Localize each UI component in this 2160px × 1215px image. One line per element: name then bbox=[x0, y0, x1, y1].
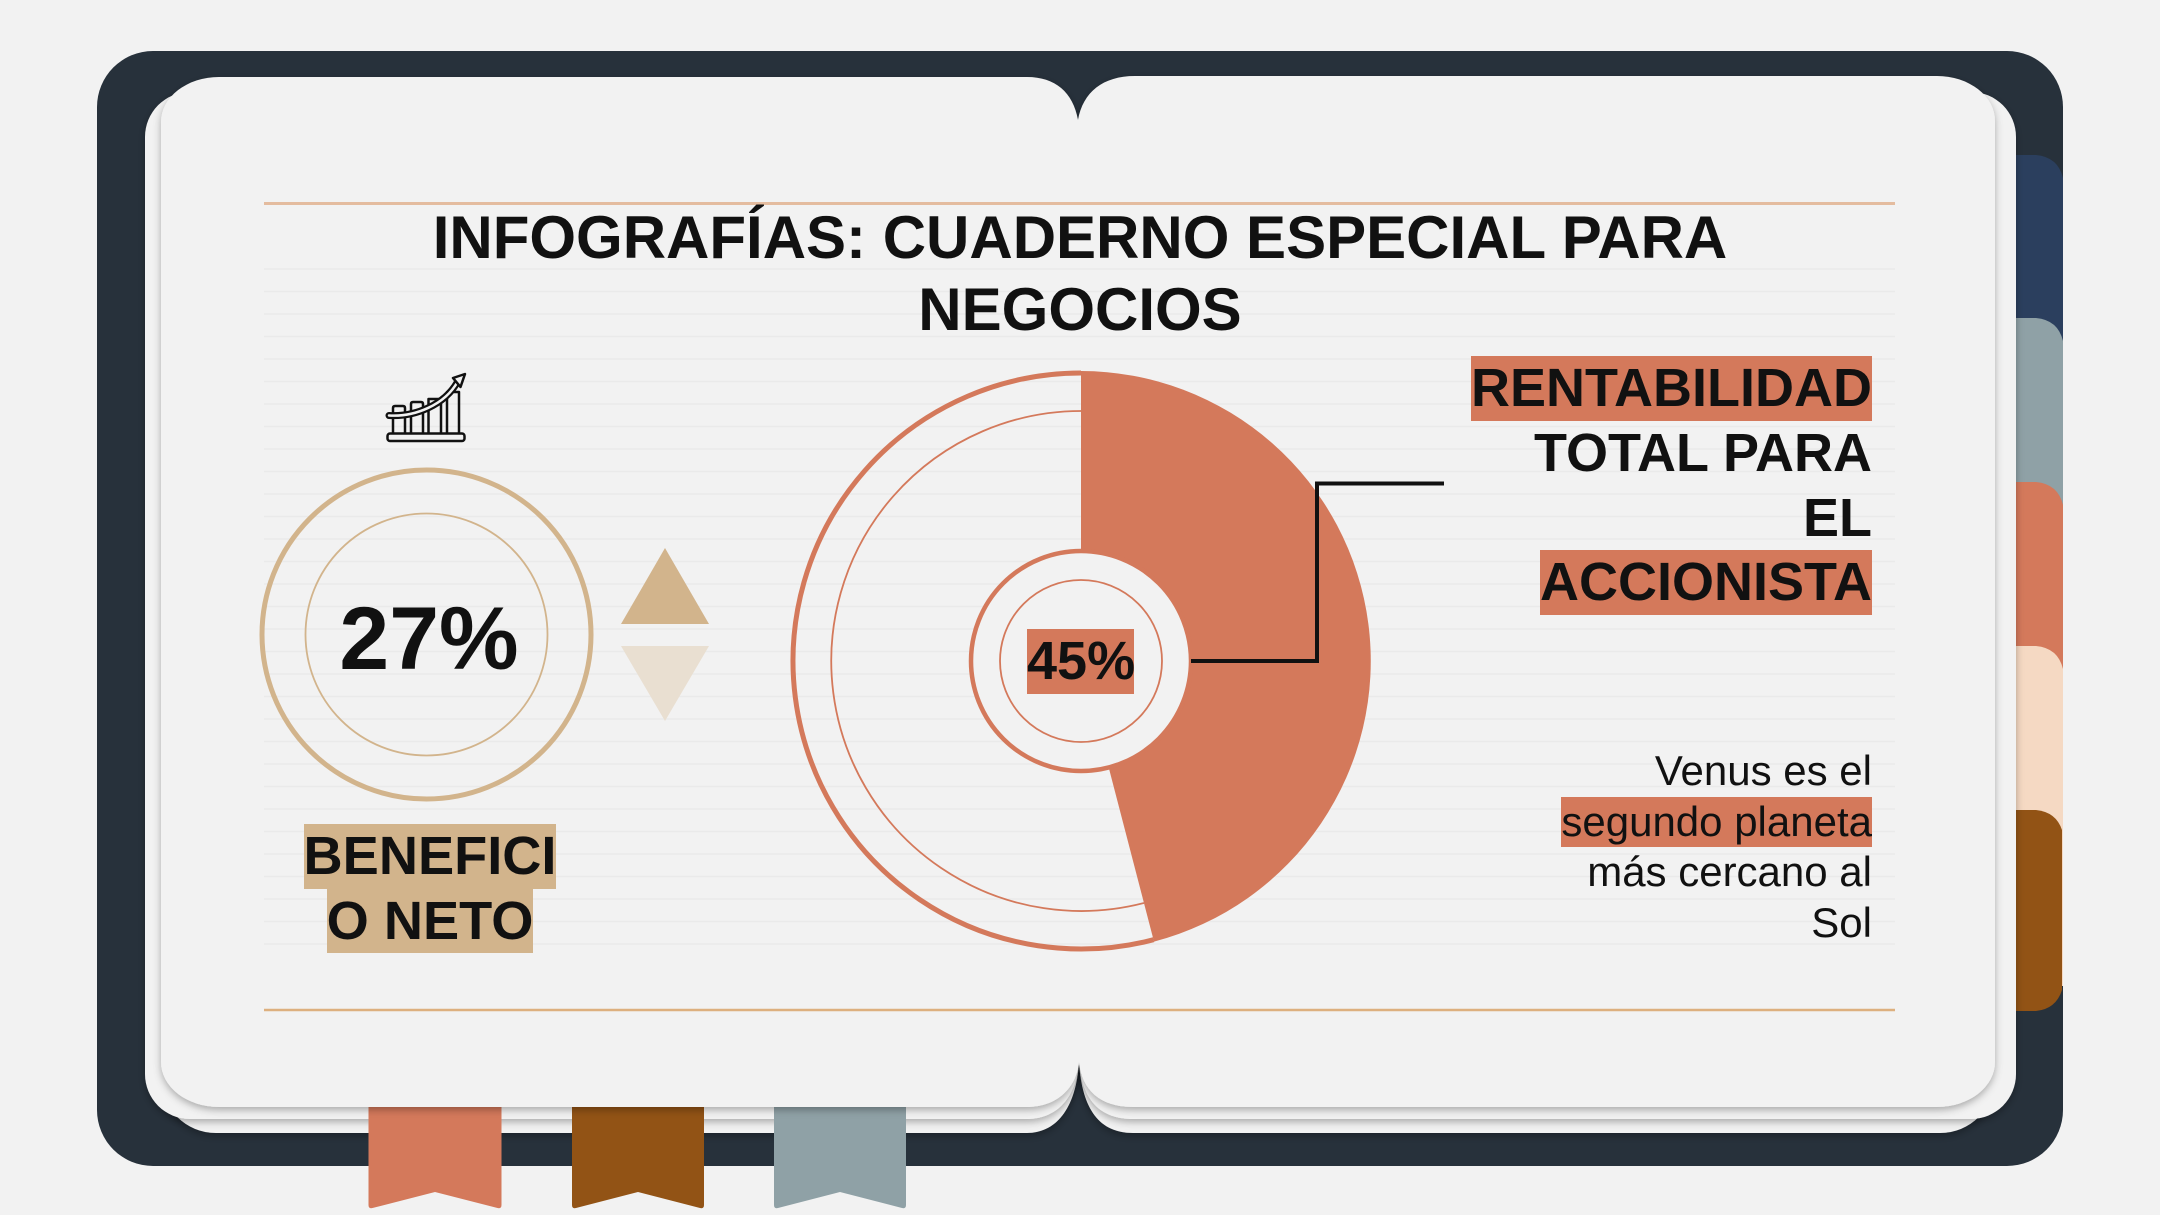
description text: más cercano al bbox=[1587, 848, 1872, 895]
icon: growth chart bbox=[388, 374, 465, 441]
description text: segundo planeta bbox=[1561, 798, 1872, 844]
label: rentabilidad total para el accionista: TOTAL PARA bbox=[1534, 423, 1872, 483]
top spine notch bbox=[1015, 60, 1145, 125]
title: INFOGRAFÍAS: CUADERNO ESPECIAL PARA bbox=[433, 204, 1727, 271]
back page layer bbox=[161, 92, 1995, 1133]
connector line bbox=[1191, 484, 1444, 661]
left ring gauge bbox=[262, 470, 591, 799]
triangle up bbox=[621, 548, 709, 624]
label: beneficio neto: O NETO bbox=[327, 890, 533, 950]
description text bbox=[1561, 747, 1872, 946]
label: rentabilidad total para el accionista: RENTABILIDAD bbox=[1471, 358, 1872, 418]
value 27%: 27% bbox=[339, 588, 519, 688]
front page bbox=[161, 76, 1995, 1107]
label: beneficio neto bbox=[304, 824, 556, 953]
title bbox=[433, 204, 1727, 343]
side index tabs bbox=[2016, 155, 2063, 1011]
label: beneficio neto: BENEFICI bbox=[304, 826, 556, 886]
bookmark ribbons bbox=[368, 1100, 906, 1208]
triangle down bbox=[621, 646, 709, 721]
middle page layer bbox=[145, 92, 2016, 1119]
label: rentabilidad total para el accionista bbox=[1471, 356, 1872, 615]
pie chart 45% bbox=[793, 371, 1371, 949]
value 45%: 45% bbox=[1027, 631, 1135, 691]
description text: Sol bbox=[1811, 898, 1872, 946]
label: rentabilidad total para el accionista: EL bbox=[1803, 488, 1872, 548]
title: NEGOCIOS bbox=[918, 276, 1242, 343]
label: rentabilidad total para el accionista: ACCIONISTA bbox=[1540, 552, 1872, 612]
description text: Venus es el bbox=[1655, 747, 1872, 794]
